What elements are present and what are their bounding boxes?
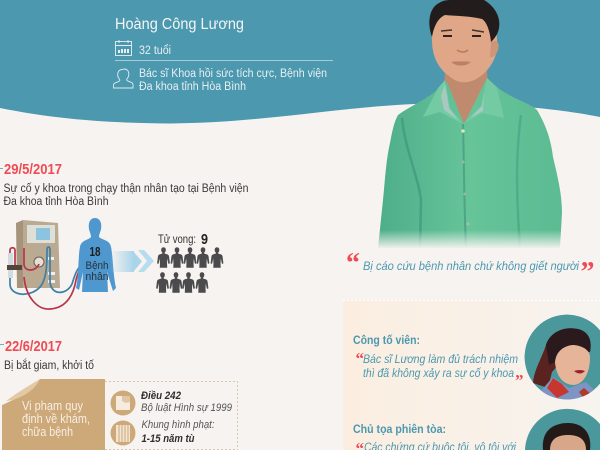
prosecutor statement <box>353 333 524 390</box>
deaths count <box>158 231 208 248</box>
age: 32 tuổi <box>139 45 171 57</box>
arrow: patients to deaths <box>110 250 154 272</box>
prosecutor statement: “ <box>356 349 364 368</box>
event: 29/5/2017 <box>0 161 248 208</box>
charge note card <box>2 379 105 450</box>
quote text: Bị cáo cứu bệnh nhân chứ không giết người <box>363 259 579 273</box>
panel: trial statements <box>343 300 600 450</box>
profile: name, age, occupation <box>114 16 333 93</box>
prosecutor statement: Bác sĩ Lương làm đủ trách nhiệm <box>363 352 518 366</box>
opening quote mark: “ <box>346 248 360 279</box>
icon: calendar <box>116 40 132 56</box>
description <box>4 183 248 208</box>
code name: Bộ luật Hình sự 1999 <box>141 402 232 414</box>
occupation: Bác sĩ Khoa hồi sức tích cực, Bệnh viện <box>139 68 327 80</box>
portrait: prosecutor <box>524 314 600 400</box>
occupation <box>139 68 327 93</box>
prosecutor statement: thì đã không xảy ra sự cố y khoa <box>363 366 514 380</box>
patient label <box>86 260 108 283</box>
icon: person outline <box>114 69 133 88</box>
charge note card: Vi phạm quy <box>22 399 84 413</box>
penalty value: 1-15 năm tù <box>142 433 195 445</box>
charge details panel <box>105 382 238 450</box>
icon: prison bars <box>110 420 136 446</box>
icon: dialysis machine <box>7 220 83 309</box>
icon row: nine deceased figures <box>156 247 223 293</box>
name: Hoàng Công Lương <box>115 16 244 33</box>
patient label: Bệnh <box>86 260 108 272</box>
penalty label: Khung hình phạt: <box>142 419 214 431</box>
article number: Điều 242 <box>141 390 181 402</box>
description: Bị bắt giam, khởi tố <box>4 359 95 372</box>
charge note card: chữa bệnh <box>22 425 73 439</box>
deaths count: Tử vong: <box>158 234 196 246</box>
header band <box>0 0 600 124</box>
presiding judge statement <box>353 422 516 450</box>
icon: law book <box>110 390 136 416</box>
prosecutor statement: Công tố viên: <box>353 333 420 347</box>
date: 22/6/2017 <box>5 338 62 355</box>
date: 29/5/2017 <box>4 161 62 178</box>
description: Sự cố y khoa trong chạy thận nhân tạo tại Bệnh viện <box>4 183 248 195</box>
patient label: nhân <box>86 271 108 283</box>
closing quote mark: ” <box>580 257 594 288</box>
icon: patient figure with count <box>76 218 116 292</box>
description: Đa khoa tỉnh Hòa Bình <box>4 196 108 208</box>
occupation: Đa khoa tỉnh Hòa Bình <box>139 81 246 93</box>
photo: doctor portrait <box>370 0 570 249</box>
deaths count: 9 <box>201 231 208 248</box>
event: 22/6/2017 <box>0 338 95 372</box>
charge note card: định về khám, <box>22 412 90 426</box>
portrait: presiding judge <box>525 409 600 450</box>
pull quote: defendant <box>346 248 594 288</box>
presiding judge statement: Chủ tọa phiên tòa: <box>353 422 446 436</box>
prosecutor statement: ” <box>515 371 524 390</box>
patient count: 18 <box>90 245 101 259</box>
